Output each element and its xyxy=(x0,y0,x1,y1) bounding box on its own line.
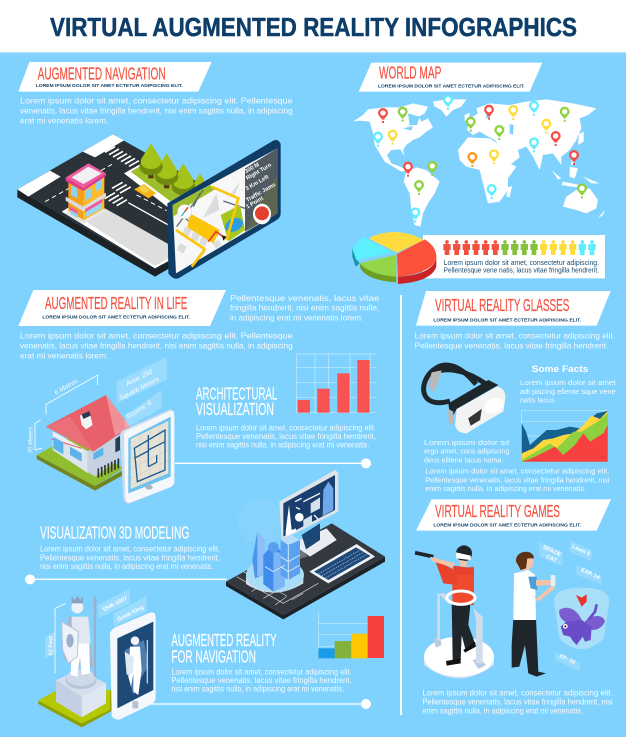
dimension labels: 6 Metres xyxy=(53,377,80,397)
dimension labels: Area: 250 xyxy=(124,368,154,388)
AR user with phone xyxy=(512,552,555,677)
text block: right intro: in adipiscing erat mi venenatis lorem. xyxy=(230,312,363,322)
directions: Traffic Jams xyxy=(245,182,277,204)
panel: virtual reality games xyxy=(415,499,613,715)
holographic cat xyxy=(554,588,609,649)
text block: intro: Lorem ipsum dolor sit amet, consectetur adipiscing elit. xyxy=(415,330,615,340)
directions: 3 Km Left xyxy=(245,174,270,192)
trees xyxy=(139,143,212,208)
heading: augmented navigation: LOREM IPSUM DOLOR SIT AMET ECTETUR ADIPISCING ELIT. xyxy=(36,83,183,89)
dimension labels: 70 Meters xyxy=(28,427,34,453)
text block: facts: natis lacus. xyxy=(520,396,557,405)
area chart xyxy=(522,410,608,462)
text block: right intro: Pellentesque venenatis, lacus vitae xyxy=(230,293,380,303)
text block: 3d modeling xyxy=(40,543,220,571)
heading: augmented reality in life xyxy=(18,290,226,326)
text block: facts xyxy=(520,378,616,405)
text block: 3d modeling: Lorem ipsum dolor sit amet, consectetur adipiscing elit. xyxy=(40,543,220,553)
taxi xyxy=(134,184,156,200)
panel: world map xyxy=(352,62,605,284)
heading: augmented reality in life: AUGMENTED REALITY IN LIFE xyxy=(45,293,187,313)
heading: world map xyxy=(359,62,542,92)
world map xyxy=(353,99,605,227)
icon: VR headset xyxy=(424,365,506,433)
text block: below chart: enim sagittis nulla, in adipiscing erat mi venenatis. xyxy=(425,484,586,493)
connector line xyxy=(25,574,227,584)
statue xyxy=(38,588,147,727)
heading: augmented reality for navigation xyxy=(171,630,277,667)
heading: world map: LOREM IPSUM DOLOR SIT AMET ECTETUR ADIPISCING ELIT. xyxy=(378,83,525,89)
text block: below chart xyxy=(425,467,610,493)
text block: left intro: Lorem ipsum dolor sit amet, consectetur adipiscing elit. Pellentesque xyxy=(20,331,293,341)
connector line xyxy=(175,458,371,468)
people pictogram xyxy=(443,240,596,255)
panel: 3D modeling xyxy=(25,522,384,727)
text block: navigation: Lorem ipsum dolor sit amet, consectetur adipiscing elit. xyxy=(171,666,352,676)
map pins xyxy=(373,95,587,222)
text block: games: Lorem ipsum dolor sit amet, consectetur adipiscing elit. xyxy=(422,688,613,698)
VR player on platform xyxy=(415,545,494,678)
text block: Lorem ipsum dolor sit amet, consectetur adipiscing elit. Pellentesque xyxy=(20,96,293,106)
text block: architectural: Pellentesque venenatis, lacus vitae fringilla hendrerit, xyxy=(196,431,376,441)
panel: virtual reality glasses xyxy=(415,291,616,493)
text block: intro: Pellentesque venenatis, lacus vitae fringilla hendrerit. xyxy=(415,340,608,350)
text block: erat mi venenatis lorem. xyxy=(20,115,108,125)
text block: architectural xyxy=(196,422,376,450)
heading: architectural visualization: ARCHITECTURAL xyxy=(196,383,277,403)
text block: 3d modeling: nisi enim sagittis nulla, in adipiscing erat mi venenatis. xyxy=(40,561,213,571)
text block: navigation: nisi enim sagittis nulla, in adipiscing erat mi venenatis. xyxy=(171,684,344,694)
statue labels: 1546-1607 xyxy=(102,596,128,613)
isometric house xyxy=(28,357,167,491)
heading: virtual reality games xyxy=(416,499,611,531)
holographic city xyxy=(246,532,307,593)
panel: augmented navigation xyxy=(17,62,293,277)
divider xyxy=(400,295,402,715)
text block: under headset xyxy=(424,438,509,464)
text block: facts: adi piscing ellente sque vene xyxy=(520,387,616,396)
text block: navigation xyxy=(171,666,352,694)
text block: intro xyxy=(415,330,615,350)
pie chart xyxy=(352,232,436,284)
dimension labels: Rooms: 6 xyxy=(125,400,153,421)
text block: left intro xyxy=(20,331,293,360)
heading: some facts: Some Facts xyxy=(532,364,588,374)
monitor xyxy=(279,470,338,557)
text block: venenatis, lacus vitae fringilla hendrerit, nisi enim sagittis nulla, in adipiscing xyxy=(20,106,293,116)
legend panel: Lorem ipsum dolor sit amet, consectetur adipiscing. xyxy=(444,258,599,267)
heading: virtual reality glasses: LOREM IPSUM DOLOR SIT AMET ECTETUR ADIPISCING ELIT. xyxy=(433,318,582,324)
record button xyxy=(253,204,271,224)
text block: games xyxy=(422,688,613,715)
smartphone xyxy=(110,612,156,720)
heading: world map: WORLD MAP xyxy=(379,62,441,82)
legend panel xyxy=(423,235,605,278)
text block: left intro: venenatis, lacus vitae fringilla hendrerit, nisi enim sagittis nulla, in adipiscing xyxy=(20,341,293,351)
shop building xyxy=(65,163,106,224)
heading: augmented navigation xyxy=(18,62,212,92)
heading: augmented reality for navigation: FOR NAVIGATION xyxy=(171,647,256,667)
floating game labels: Level 5 xyxy=(571,544,591,558)
text block: under headset: Lorem ipsum dolor sit xyxy=(424,438,509,447)
3D city on desk xyxy=(226,470,385,619)
directions xyxy=(244,162,277,210)
statue labels: 52 Feet xyxy=(49,636,55,655)
floating game labels xyxy=(539,540,602,672)
text block: under headset: ergo amet, cons adipiscing xyxy=(424,447,509,456)
text block: right intro: fringilla hendrerit, nisi enim sagittis nulla, xyxy=(230,303,379,313)
heading: augmented reality in life: LOREM IPSUM DOLOR SIT AMET ECTETUR ADIPISCING ELIT. xyxy=(42,315,191,321)
isometric street scene xyxy=(17,134,253,277)
panel: augmented reality in life xyxy=(18,290,380,504)
floating game labels: EXP. 14 xyxy=(580,567,601,582)
floating game labels: SPACE xyxy=(542,545,562,558)
floating game labels: CAT xyxy=(545,554,558,564)
statue labels xyxy=(49,596,145,655)
dimension labels: Square Meters xyxy=(118,376,161,402)
legend panel: Pellentesque vene natis, lacus vitae fringilla hendrerit. xyxy=(444,266,599,275)
compass xyxy=(178,205,192,219)
keyboard xyxy=(309,544,375,583)
title band xyxy=(0,0,626,54)
dimension labels xyxy=(28,368,161,453)
floating game labels: XP: 30 xyxy=(558,653,576,666)
heading: augmented reality for navigation: AUGMENTED REALITY xyxy=(171,630,277,650)
bar chart: architectural xyxy=(297,353,377,413)
bar chart: navigation xyxy=(318,612,384,658)
directions: Right Turn xyxy=(245,162,273,182)
heading: architectural visualization xyxy=(196,383,277,419)
directions: 1 Point xyxy=(245,196,265,210)
text block: below chart: Pellentesque venenatis, lacus vitae fringilla hendrerit, nisi xyxy=(425,475,610,484)
floor plan tablet xyxy=(120,410,174,504)
text block: right intro xyxy=(230,293,380,322)
text block: architectural: Lorem ipsum dolor sit amet, consectetur adipiscing elit. xyxy=(196,422,376,432)
text block: 3d modeling: Pellentesque venenatis, lacus vitae fringilla hendrerit, xyxy=(40,552,220,562)
text block: left intro: erat mi venenatis lorem. xyxy=(20,350,108,360)
text block: architectural: nisi enim sagittis nulla, in adipiscing erat mi venenatis. xyxy=(196,440,369,450)
text block: under headset: dens elitene lacus noma. xyxy=(424,455,503,464)
text block: below chart: Lorem ipsum dolor sit amet, consectetur adipiscing elit. xyxy=(425,467,609,476)
text block: navigation: Pellentesque venenatis, lacus vitae fringilla hendrerit, xyxy=(171,675,352,685)
text block: facts: Lorem ipsum dolor sit amet xyxy=(520,378,616,387)
text block: games: enim sagittis nulla, in adipiscing erat mi venenatis. xyxy=(422,705,583,715)
heading: architectural visualization: VISUALIZATION xyxy=(196,399,274,419)
heading: augmented navigation: AUGMENTED NAVIGATION xyxy=(38,63,166,83)
heading: virtual reality games: LOREM IPSUM DOLOR SIT AMET ECTETUR ADIPISCING ELIT. xyxy=(433,523,582,529)
directions: 300 M xyxy=(244,162,261,175)
heading: visualization 3d modeling: VISUALIZATION 3D MODELING xyxy=(40,522,189,542)
text block xyxy=(20,96,293,125)
heading: virtual reality glasses xyxy=(416,291,611,326)
connector line xyxy=(147,699,371,709)
navigation tablet xyxy=(167,140,281,279)
statue labels: Great King xyxy=(117,604,145,623)
